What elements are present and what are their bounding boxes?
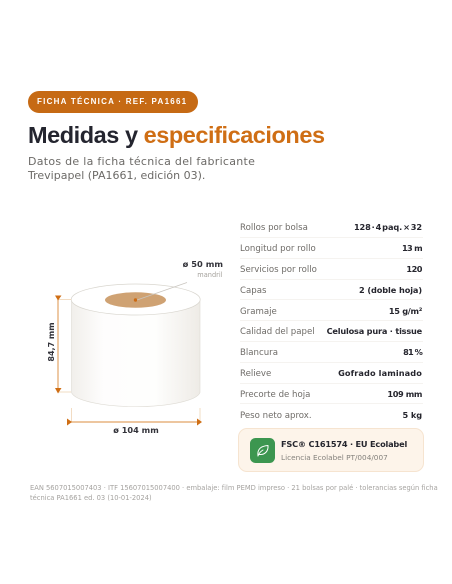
height dimension [47,296,71,394]
row: blancura: 81 % [403,347,422,357]
title: Medidas y especificaciones [28,122,325,148]
width dimension: ø 104 mm [113,425,159,435]
roll body [72,300,200,407]
height dimension: 84,7 mm [47,322,56,362]
row: calidad del papel [240,321,423,342]
row: relieve: Gofrado laminado [338,368,422,378]
row: relieve [240,363,423,384]
row: gramaje: 15 g/m² [389,306,422,316]
mandrel label [183,259,223,279]
subtitle: Datos de la ficha técnica del fabricante [28,154,255,168]
row: gramaje: Gramaje [240,306,277,316]
row: rollos por bolsa: 128 · 4 paq. × 32 [354,222,422,232]
row: precorte de hoja: 109 mm [387,389,422,399]
row: blancura [240,342,423,363]
core centre dot [134,298,137,302]
row: relieve: Relieve [240,369,271,379]
roll top [71,284,200,315]
row: peso neto: 5 kg [403,410,422,420]
row: rollos por bolsa [240,217,423,238]
row: longitud por rollo [240,238,423,259]
subtitle: Trevipapel (PA1661, edición 03). [28,169,205,182]
leader line [137,282,187,300]
row: servicios por rollo: Servicios por rollo [240,265,317,275]
row: rollos por bolsa: Rollos por bolsa [240,223,308,233]
row: precorte de hoja [240,384,423,404]
row: peso neto: Peso neto aprox. [240,410,312,420]
row: blancura: Blancura [240,348,278,358]
width dimension [67,408,202,435]
footnote: EAN 5607015007403 · ITF 15607015007400 · embalaje: film PEMD impreso · 21 bolsas por palé · tolerancias según ficha [30,484,438,492]
row: servicios por rollo: 120 [406,264,422,274]
icon: leaf [250,438,275,463]
subtitle [28,154,255,182]
row: gramaje [240,300,423,321]
row: calidad del papel: Celulosa pura · tissue [327,326,422,336]
mandrel label: ø 50 mm [183,259,223,269]
row: capas: Capas [240,286,266,296]
row: calidad del papel: Calidad del papel [240,327,315,337]
diagram: paper roll with dimensions [47,259,223,435]
row: longitud por rollo: 13 m [402,243,422,253]
row: precorte de hoja: Precorte de hoja [240,390,310,400]
certification name: FSC® C161574 · EU Ecolabel [281,438,407,448]
badge: ficha técnica: FICHA TÉCNICA · REF. PA1661 [37,97,187,106]
row: peso neto [240,410,422,420]
row: longitud por rollo: Longitud por rollo [240,244,316,254]
footnote: técnica PA1661 ed. 03 (10-01-2024) [30,494,152,502]
licence number: Licencia Ecolabel PT/004/007 [281,452,388,462]
row: servicios por rollo [240,259,423,280]
row: capas [240,280,423,300]
footnote [30,484,438,502]
badge: ficha técnica [28,91,198,112]
certification card [238,428,424,472]
row: capas: 2 (doble hoja) [359,285,422,295]
mandrel core [105,292,166,308]
mandrel label: mandril [197,271,223,279]
